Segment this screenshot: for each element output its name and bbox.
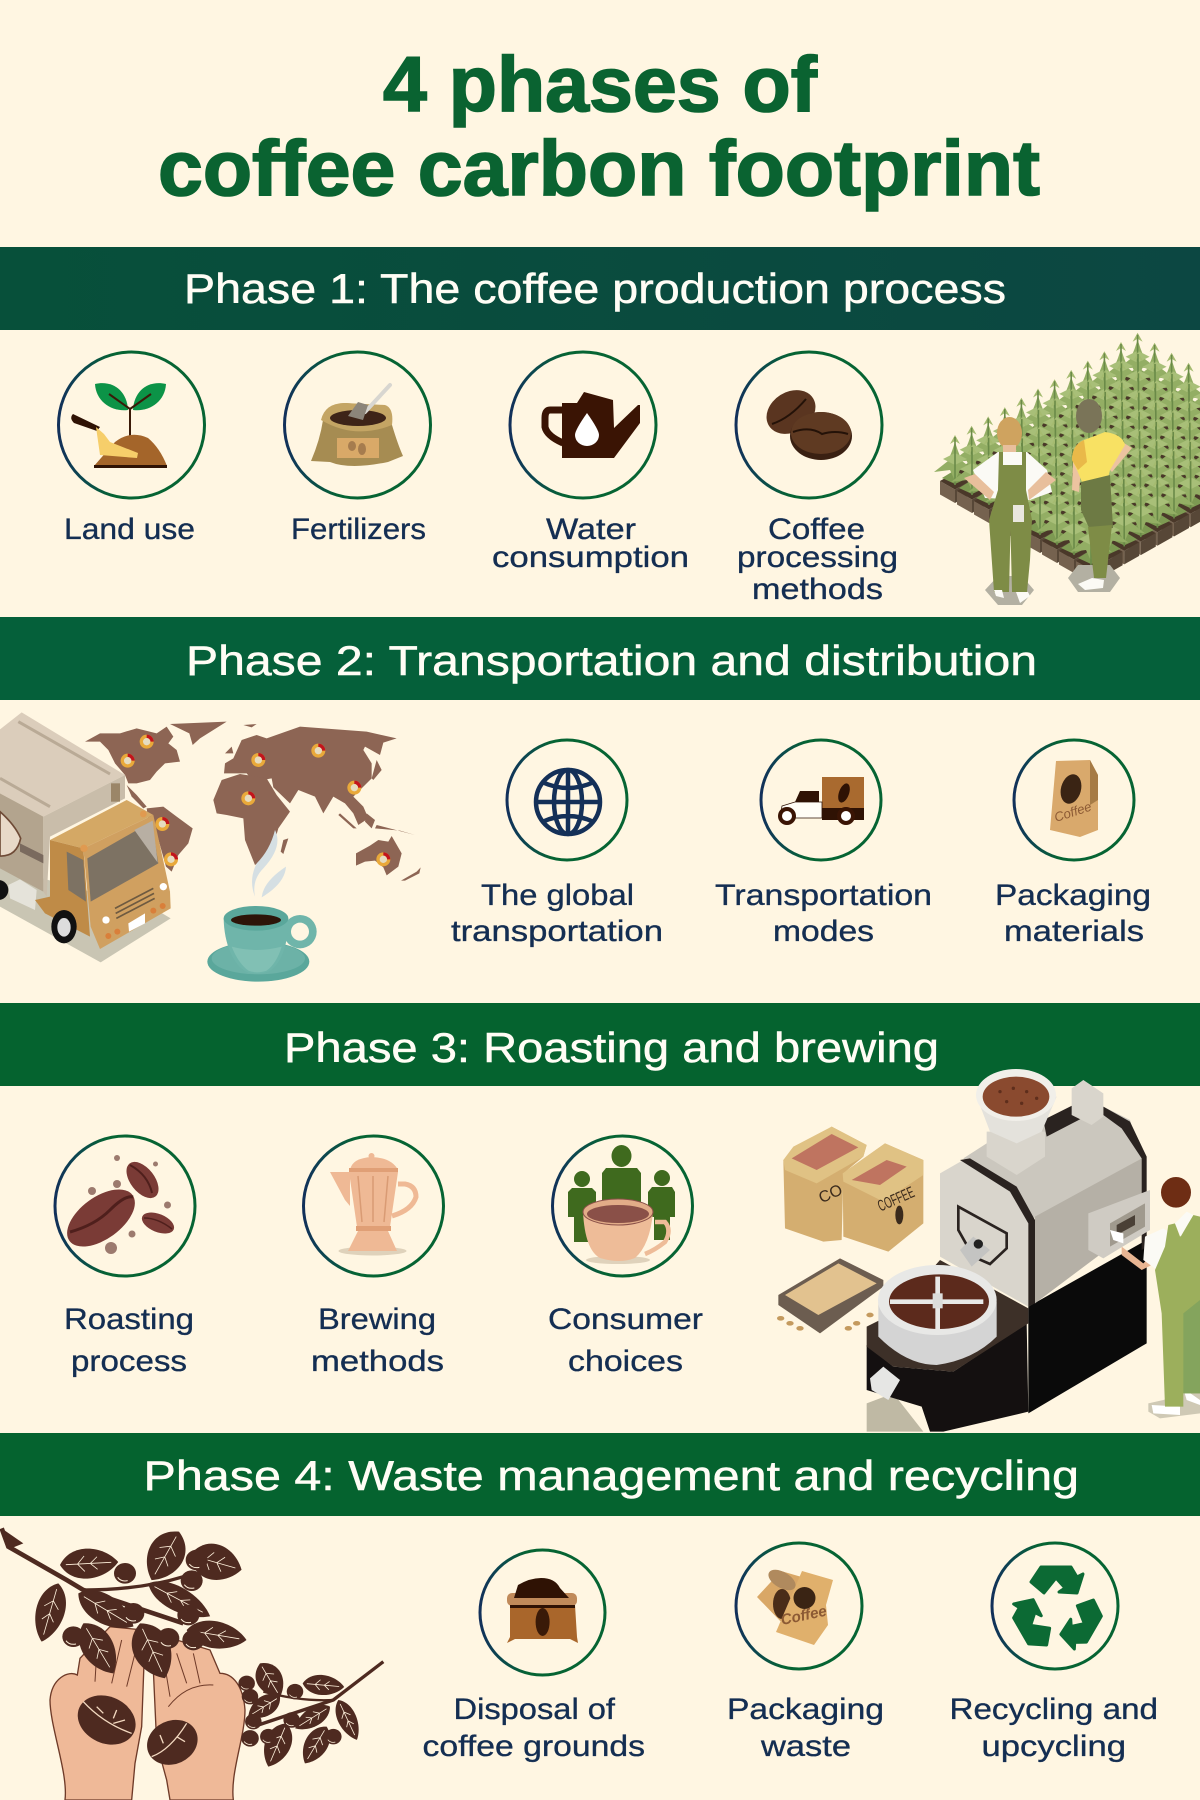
icon: coffee processing: [736, 352, 882, 498]
illustration: hands with coffee branches: [2, 1523, 383, 1800]
icon: brewing methods: [304, 1136, 444, 1276]
label: the global transportation: [451, 879, 663, 948]
beans on palms: [70, 1686, 205, 1773]
label: disposal of coffee grounds: coffee grounds: [422, 1730, 645, 1763]
label: fertilizers: Fertilizers: [291, 513, 426, 546]
farmer in overalls: [964, 417, 1056, 605]
label: packaging materials: [995, 879, 1151, 948]
label: roasting process: [64, 1303, 194, 1378]
label: transportation modes: [715, 879, 932, 948]
label: transportation modes: modes: [773, 915, 874, 948]
panel: phase 1: [0, 247, 1200, 606]
label: roasting process: process: [71, 1345, 187, 1378]
panel: phase 2: [0, 617, 1200, 982]
heading: phase 1: [0, 247, 1200, 330]
label: coffee processing methods: processing: [737, 541, 898, 574]
farmer in yellow shirt: [1068, 399, 1132, 592]
coffee cup with steam: [207, 830, 317, 982]
label: recycling and upcycling: Recycling and: [950, 1693, 1158, 1726]
label: water consumption: [492, 513, 689, 574]
truck: [0, 712, 171, 962]
panel: phase 3: [0, 1003, 1200, 1432]
heading: phase 4: Phase 4: Waste management and recycling: [144, 1452, 1079, 1499]
icon: recycling: [992, 1543, 1118, 1669]
label: consumer choices: Consumer: [548, 1303, 703, 1336]
label: the global transportation: transportation: [451, 915, 663, 948]
label: recycling and upcycling: upcycling: [982, 1730, 1126, 1763]
coffee sacks: CO: [816, 1182, 845, 1207]
icon: disposal of coffee grounds: [480, 1550, 605, 1675]
title: [158, 40, 1040, 212]
green bean tray: [777, 1258, 883, 1333]
icon: packaging materials: Coffee: [1052, 799, 1093, 825]
icon: consumer choices: [552, 1136, 692, 1276]
icon: roasting process: [55, 1136, 195, 1276]
label: packaging materials: Packaging: [995, 879, 1151, 912]
heading: phase 2: Phase 2: Transportation and distribution: [186, 637, 1037, 684]
label: coffee processing methods: methods: [752, 573, 883, 606]
label: water consumption: Water: [546, 513, 636, 546]
label: disposal of coffee grounds: Disposal of: [454, 1693, 616, 1726]
panel: phase 4: [0, 1433, 1200, 1800]
map markers: [121, 735, 390, 866]
label: consumer choices: choices: [568, 1345, 683, 1378]
label: the global transportation: The global: [481, 879, 634, 912]
icon: fertilizers: [284, 352, 430, 498]
label: packaging waste: [727, 1693, 884, 1763]
coffee sacks: COFFEE: [875, 1184, 917, 1215]
label: water consumption: consumption: [492, 541, 689, 574]
icon: packaging waste: Coffee: [779, 1603, 828, 1629]
illustration: world map, truck and cup: [0, 712, 421, 982]
hands: [50, 1627, 245, 1800]
icon: the global transportation: [507, 740, 627, 860]
label: brewing methods: Brewing: [318, 1303, 436, 1336]
icon: water consumption: [510, 352, 656, 498]
icon: transportation modes: [761, 740, 881, 860]
label: packaging materials: materials: [1004, 915, 1144, 948]
label: packaging waste: Packaging: [727, 1693, 884, 1726]
upper coffee branch: [2, 1523, 249, 1686]
world map: [85, 722, 421, 881]
label: roasting process: Roasting: [64, 1303, 194, 1336]
label: disposal of coffee grounds: [422, 1693, 645, 1763]
illustration: coffee roaster: [777, 1069, 1200, 1432]
heading: phase 1: Phase 1: The coffee production process: [184, 265, 1006, 312]
icon: packaging waste: [736, 1543, 862, 1669]
icon: land use: [58, 352, 204, 498]
heading: phase 2: [0, 617, 1200, 700]
title: coffee carbon footprint: [158, 124, 1040, 212]
title: 4 phases of: [383, 40, 818, 128]
label: transportation modes: Transportation: [715, 879, 932, 912]
label: brewing methods: methods: [311, 1345, 444, 1378]
worker at control panel: [1110, 1177, 1200, 1418]
roaster machine: [867, 1069, 1150, 1432]
coffee sacks: [783, 1127, 923, 1252]
heading: phase 4: [0, 1433, 1200, 1516]
illustration: coffee seedlings and farmers: [934, 333, 1200, 605]
lower coffee branch: [238, 1657, 383, 1772]
label: recycling and upcycling: [950, 1693, 1158, 1763]
label: coffee processing methods: Coffee: [768, 513, 865, 546]
label: coffee processing methods: [737, 513, 898, 606]
heading: phase 3: Phase 3: Roasting and brewing: [284, 1024, 939, 1071]
icon: packaging materials: [1014, 740, 1134, 860]
label: consumer choices: [548, 1303, 703, 1378]
heading: phase 3: [0, 1003, 1200, 1086]
label: packaging waste: waste: [760, 1730, 851, 1763]
label: brewing methods: [311, 1303, 444, 1378]
seedling field: [934, 333, 1200, 583]
label: land use: Land use: [64, 513, 195, 546]
